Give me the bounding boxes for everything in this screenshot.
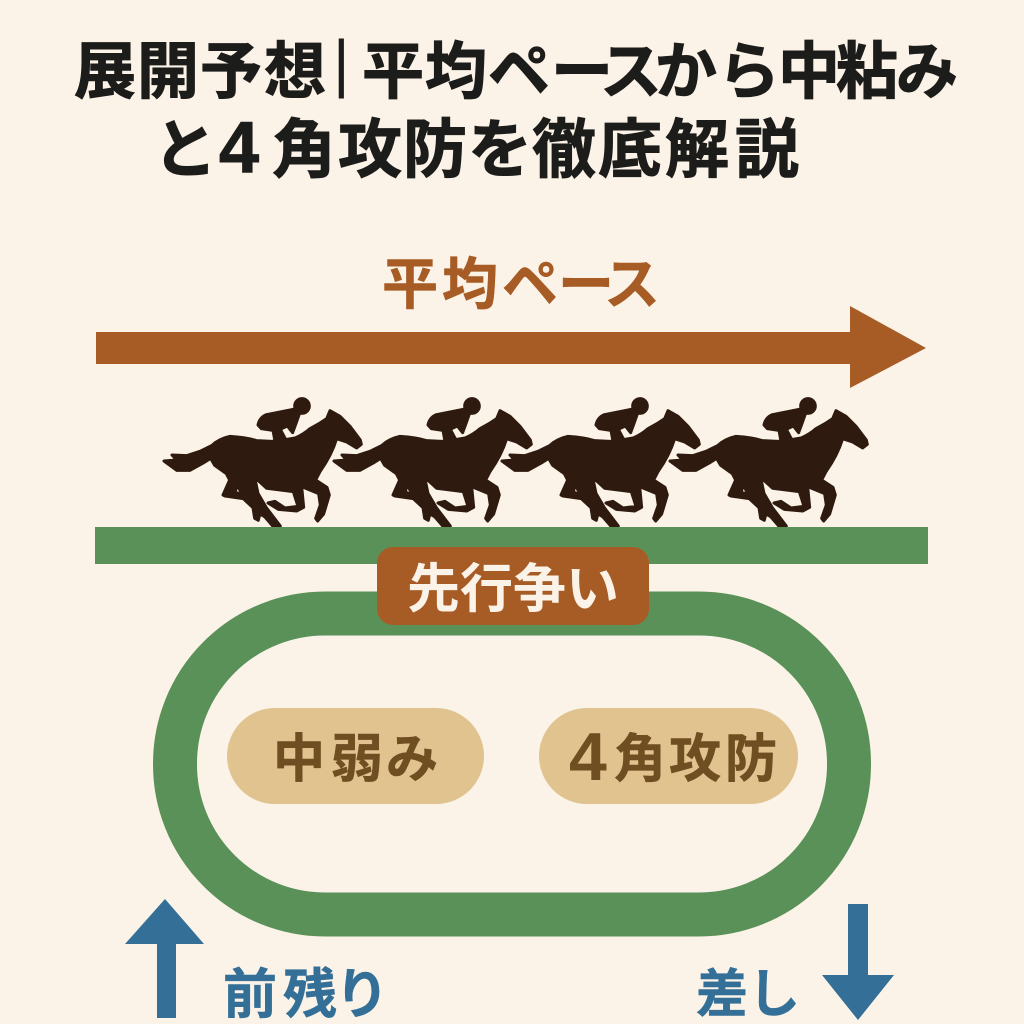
down arrow: closers: [822, 904, 894, 1020]
title: [74, 27, 958, 188]
title: |: [333, 27, 350, 99]
label: front runners hold: 前残り: [223, 965, 389, 1024]
straight track bar: [95, 527, 928, 564]
pill: mid-race hold: [227, 708, 484, 804]
title: 展開予想: [74, 38, 326, 107]
title: 4: [219, 108, 259, 188]
up arrow: front runners hold: [125, 899, 204, 1018]
title: 平均ペースから中粘み: [362, 38, 958, 107]
pill: fourth corner battle: 角攻防: [614, 731, 777, 789]
badge: early position battle: [377, 547, 649, 625]
heading: average pace: 平均ペース: [382, 253, 660, 316]
pill: mid-race hold: 中弱み: [273, 731, 438, 789]
label: closers: 差し: [696, 966, 800, 1024]
arrow: pace direction: [96, 306, 926, 388]
title: と: [153, 114, 217, 186]
badge: early position battle: 先行争い: [407, 560, 619, 619]
pill: fourth corner battle: [539, 708, 798, 804]
horses: [164, 399, 867, 529]
pill: fourth corner battle: 4: [569, 719, 607, 795]
title: 角攻防を徹底解説: [272, 114, 799, 186]
oval track: [175, 614, 849, 914]
